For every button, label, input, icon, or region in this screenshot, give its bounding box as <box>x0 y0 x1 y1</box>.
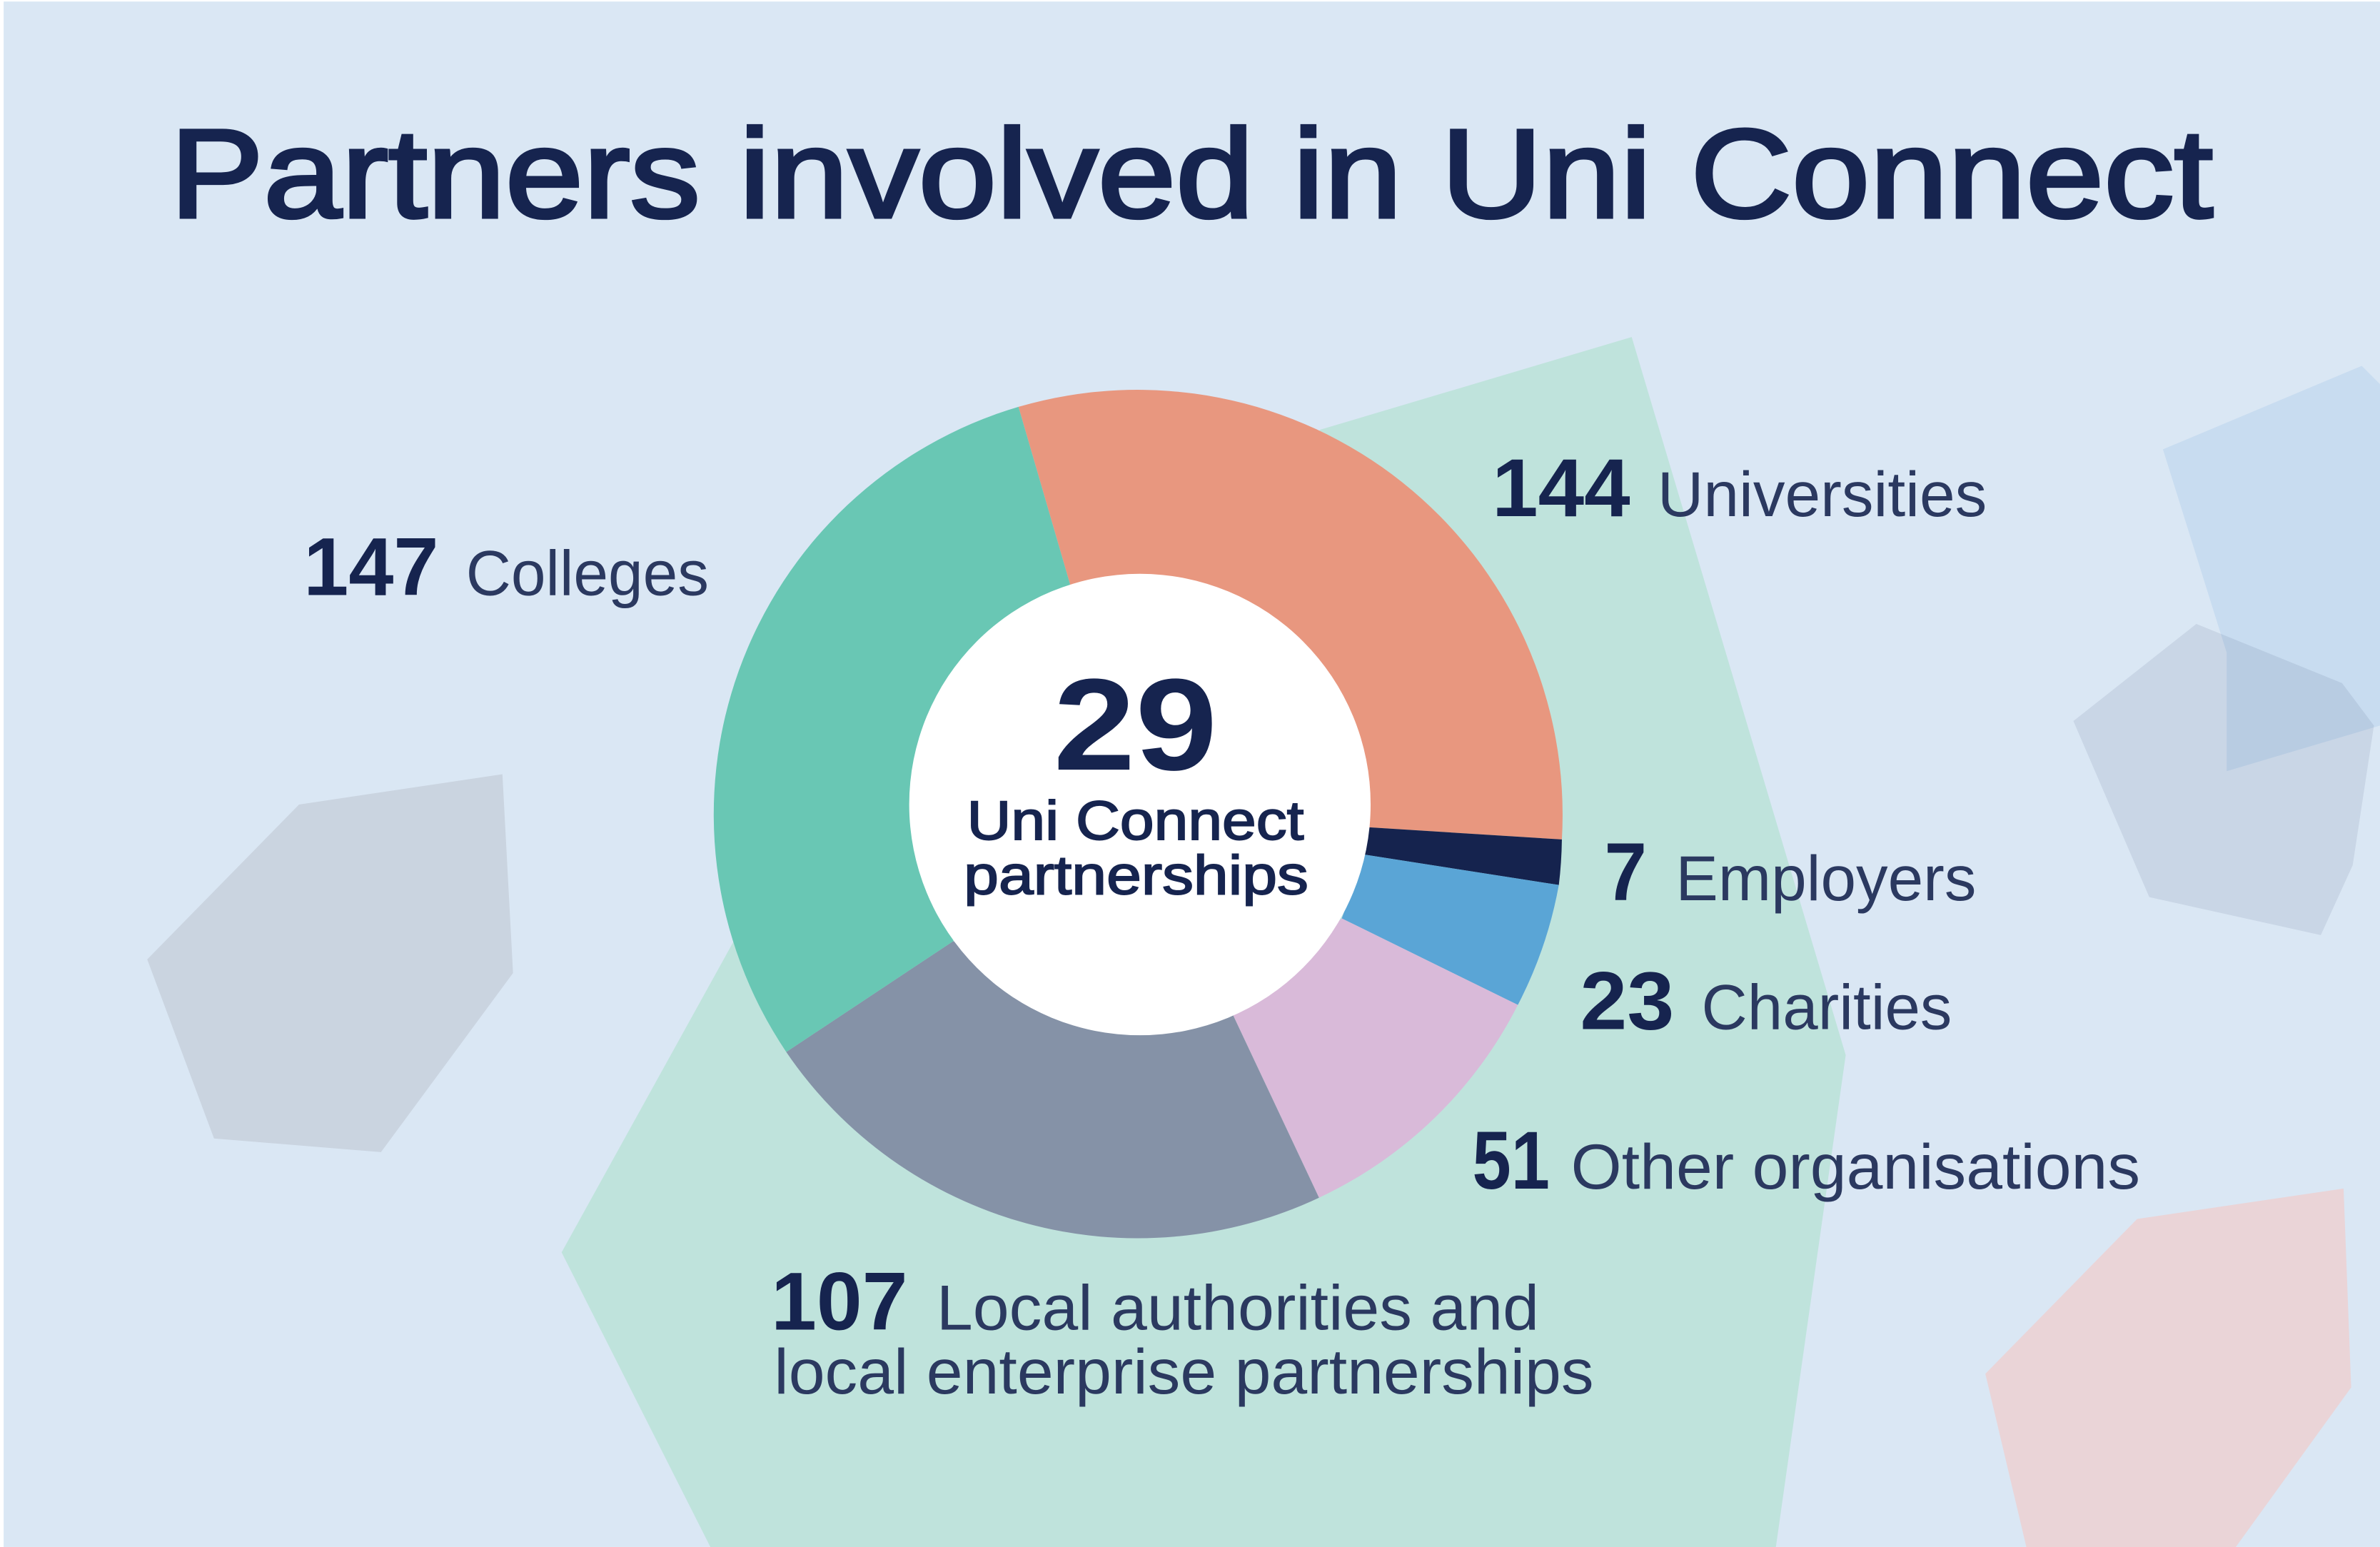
decorative shape: bottom right pink polygon <box>1985 1189 2351 1547</box>
label: universities: 144 <box>1492 443 1630 534</box>
decorative shape: right blue polygon <box>2163 366 2380 771</box>
label: colleges <box>303 522 709 613</box>
segment: colleges <box>714 407 1070 1052</box>
segment: universities <box>1019 390 1563 840</box>
donut chart <box>714 390 1563 1238</box>
label: other organisations: Other organisations <box>1571 1131 2140 1202</box>
segment: local authorities <box>786 941 1319 1238</box>
centre number: 29 <box>1054 651 1217 797</box>
centre label <box>964 791 1309 906</box>
label: charities: Charities <box>1702 972 1952 1043</box>
segment: other organisations <box>1233 918 1518 1198</box>
centre label: partnerships <box>964 845 1309 906</box>
label: employers: Employers <box>1675 842 1976 914</box>
donut centre circle <box>909 574 1371 1035</box>
decorative shape: right grey polygon <box>2073 624 2374 935</box>
label: employers <box>1604 827 1976 918</box>
label: other organisations <box>1472 1115 2140 1206</box>
segment: charities <box>1342 855 1559 1005</box>
title: Partners involved in Uni Connect <box>170 104 2213 244</box>
label: employers: 7 <box>1604 827 1647 918</box>
label: colleges: 147 <box>303 522 438 613</box>
label: universities: Universities <box>1658 458 1987 530</box>
label: local authorities and local enterprise partnerships: local enterprise partnerships <box>774 1336 1594 1407</box>
label: local authorities and local enterprise partnerships: 107 <box>771 1256 908 1348</box>
label: charities <box>1580 956 1952 1047</box>
label: charities: 23 <box>1580 956 1674 1047</box>
decorative shape: left grey polygon <box>147 774 513 1152</box>
label: other organisations: 51 <box>1472 1115 1550 1206</box>
segment: employers <box>1365 827 1562 885</box>
label: local authorities and local enterprise partnerships: Local authorities and <box>937 1272 1539 1344</box>
label: universities <box>1492 443 1987 534</box>
label: colleges: Colleges <box>466 538 709 609</box>
decorative shape: large green polygon <box>562 337 1846 1547</box>
centre label: Uni Connect <box>967 791 1304 852</box>
label: local authorities and local enterprise partnerships <box>771 1256 1594 1407</box>
